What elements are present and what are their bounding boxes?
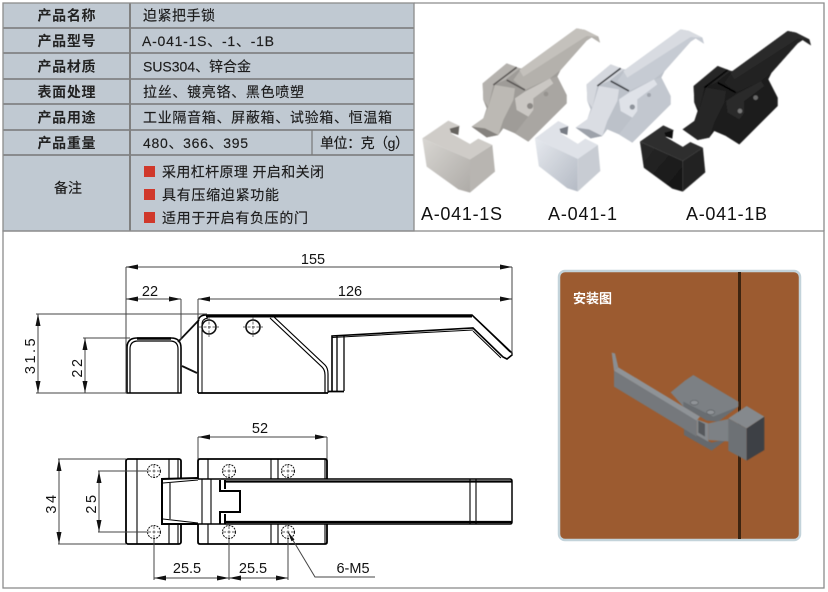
row: product model: A-041-1S、-1、-1B <box>142 33 274 49</box>
dimension 22 horizontal <box>126 284 181 302</box>
dimension 25.5 left <box>154 561 229 580</box>
dimension 22 vertical <box>70 338 88 393</box>
keeper outline <box>127 338 181 393</box>
row: product name: 迫紧把手锁 <box>143 8 215 24</box>
dimension 34: 34 <box>44 492 60 514</box>
dimension 25 <box>84 471 102 532</box>
product photo: chrome latch A-041-1 <box>576 29 704 143</box>
row: product weight: 480、366、395 <box>143 135 248 151</box>
row: product weight: 产品重量 <box>38 135 96 151</box>
dimension 22 horizontal: 22 <box>142 284 158 300</box>
panel: product photo frame <box>414 3 824 231</box>
dimension 25.5 right <box>229 561 288 580</box>
row: material <box>38 58 251 74</box>
panel: drawing frame <box>3 231 824 588</box>
leader: 6-M5 <box>288 532 375 577</box>
remark 2: 具有压缩迫紧功能 <box>162 187 279 203</box>
top view drawing <box>126 459 512 544</box>
product photo: black latch A-041-1B <box>683 31 811 144</box>
heading: installation diagram: 安装图 <box>573 291 612 306</box>
dimension 155 <box>126 252 512 270</box>
mounting holes <box>199 317 263 337</box>
handle top view <box>198 479 512 524</box>
top view dimensions <box>44 421 375 580</box>
dimension 31.5: 31.5 <box>23 336 39 374</box>
linkage lines <box>178 320 199 373</box>
side view drawing <box>127 315 512 393</box>
label: A-041-1S: A-041-1S <box>421 204 502 224</box>
panel: installation view <box>559 271 800 540</box>
row: surface treatment: 拉丝、镀亮铬、黑色喷塑 <box>143 84 304 100</box>
base top view <box>198 459 327 544</box>
label: A-041-1: A-041-1 <box>548 204 617 224</box>
row: product weight <box>38 135 409 151</box>
dimension 25.5 right: 25.5 <box>239 561 267 577</box>
hook tongue <box>162 478 198 524</box>
product photo: brushed steel latch A-041-1S <box>472 28 600 142</box>
screw holes <box>148 464 294 538</box>
row: product model: 产品型号 <box>38 33 96 49</box>
row: product name <box>38 8 215 24</box>
dimension 52 <box>198 421 327 440</box>
leader: 6-M5: 6-M5 <box>336 561 370 577</box>
row: product use: 产品用途 <box>38 110 96 126</box>
row: surface treatment: 表面处理 <box>38 84 96 100</box>
product photo: chrome keeper <box>535 121 600 192</box>
row: product use: 工业隔音箱、屏蔽箱、试验箱、恒温箱 <box>143 110 392 126</box>
row: material: 产品材质 <box>38 58 96 74</box>
dimension 25.5 left: 25.5 <box>173 561 201 577</box>
row: product model <box>38 33 274 49</box>
keeper top view <box>126 459 181 544</box>
dimension 31.5 <box>23 314 40 393</box>
dimension 34 <box>44 459 62 544</box>
row: surface treatment <box>38 84 304 100</box>
door gap <box>738 272 741 539</box>
dimension 22 vertical: 22 <box>70 356 86 378</box>
label: A-041-1B: A-041-1B <box>686 204 767 224</box>
dimension 52: 52 <box>252 421 268 437</box>
remark 3: 适用于开启有负压的门 <box>162 210 308 226</box>
dimension 25: 25 <box>84 492 100 514</box>
installed latch model <box>612 353 764 461</box>
dimension 155: 155 <box>301 252 325 268</box>
panel: specification table <box>3 3 414 231</box>
row: remarks label: 备注 <box>54 180 82 196</box>
row: material: SUS304、锌合金 <box>143 58 251 74</box>
row: product name: 产品名称 <box>38 8 96 24</box>
product photo: brushed steel keeper <box>422 121 495 193</box>
product photo: black keeper <box>640 125 705 192</box>
side view dimensions <box>23 252 512 393</box>
latch body and handle outline <box>198 315 512 393</box>
dimension 126: 126 <box>338 284 362 300</box>
row: product weight: 单位：克（g） <box>320 135 409 151</box>
remark 1: 采用杠杆原理 开启和关闭 <box>162 164 324 180</box>
dimension 126 <box>198 284 512 302</box>
